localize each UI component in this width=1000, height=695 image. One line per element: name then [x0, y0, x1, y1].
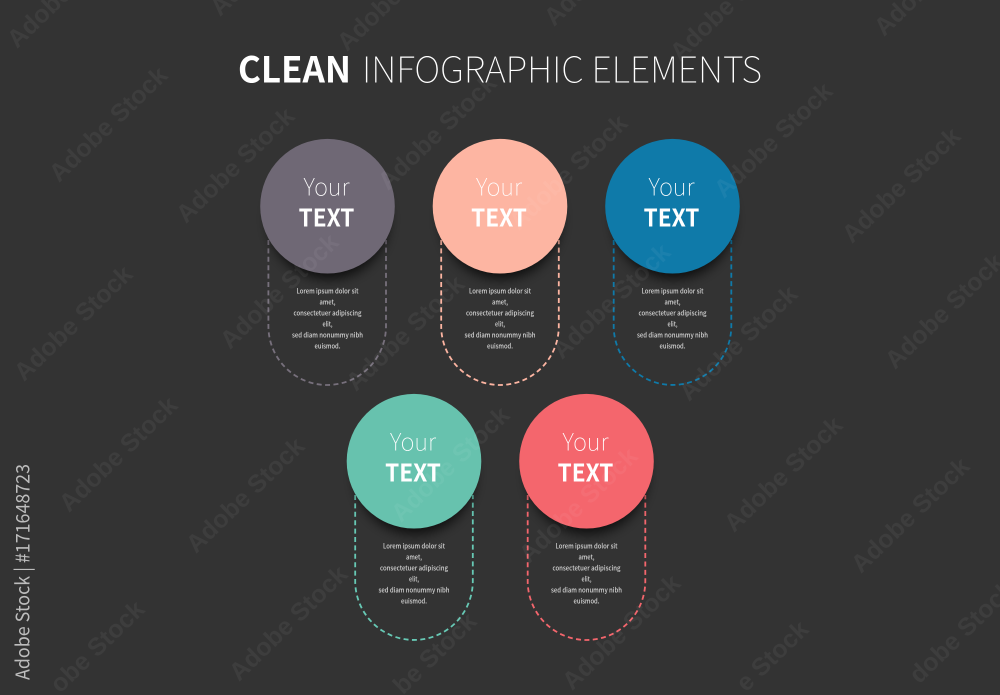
- body text: teal: elit,: [409, 574, 419, 584]
- watermark pattern: Adobe Stock: [837, 122, 966, 248]
- body text: grey: euismod.: [314, 340, 340, 350]
- body text: coral: consectetuer adipiscing: [552, 562, 621, 572]
- watermark pattern: Adobe Stock: [54, 391, 183, 517]
- label: coral: TEXT: [558, 454, 613, 489]
- circle: coral: [519, 394, 654, 534]
- watermark pattern: Adobe Stock: [547, 238, 676, 364]
- watermark pattern: Adobe Stock: [373, 69, 502, 195]
- body text: blue: sed diam nonummy nibh: [637, 330, 708, 340]
- watermark pattern: Adobe Stock: [44, 61, 173, 187]
- watermark pattern: Adobe Stock: [181, 432, 310, 558]
- body text: peach: Lorem ipsum dolor sit: [469, 286, 531, 296]
- body text: peach: amet,: [492, 296, 508, 306]
- body text: coral: sed diam nonummy nibh: [551, 584, 622, 594]
- body text: teal: euismod.: [401, 596, 427, 606]
- body text: teal: sed diam nonummy nibh: [378, 584, 450, 594]
- body text: blue: [637, 286, 708, 350]
- label: teal: Your: [390, 423, 437, 458]
- panel: peach item: [433, 139, 567, 385]
- label: blue: Your: [648, 168, 695, 203]
- body text: blue: Lorem ipsum dolor sit: [642, 286, 704, 296]
- circle: teal: [347, 394, 481, 534]
- label: peach: [471, 168, 527, 234]
- dashed outline: grey: [268, 240, 386, 385]
- watermark pattern: Adobe Stock: [709, 77, 838, 203]
- body text: grey: elit,: [322, 318, 332, 328]
- body text: grey: Lorem ipsum dolor sit: [296, 286, 359, 296]
- watermark pattern: Adobe Stock: [341, 270, 470, 396]
- dashed outline: coral: [528, 495, 645, 640]
- watermark pattern: Adobe Stock: [846, 452, 975, 578]
- body text: coral: amet,: [578, 552, 594, 562]
- body text: grey: sed diam nonummy nibh: [292, 330, 363, 340]
- panel: grey item: [260, 139, 395, 385]
- watermark pattern: Adobe Stock: [9, 260, 138, 386]
- dashed outline: blue: [614, 240, 731, 385]
- body text: peach: [464, 286, 536, 350]
- watermark pattern: Adobe Stock: [557, 569, 686, 695]
- label: coral: [558, 423, 613, 489]
- dashed outline: teal: [355, 495, 473, 640]
- watermark pattern: Adobe Stock: [386, 401, 515, 527]
- body text: teal: consectetuer adipiscing: [380, 562, 448, 572]
- body text: grey: amet,: [320, 296, 336, 306]
- watermark pattern: Adobe Stock: [171, 102, 300, 228]
- body text: coral: Lorem ipsum dolor sit: [556, 540, 618, 550]
- watermark pattern: Adobe Stock: [504, 109, 633, 235]
- body text: teal: Lorem ipsum dolor sit: [383, 540, 445, 550]
- label: teal: [385, 423, 441, 489]
- title: INFOGRAPHIC ELEMENTS: [362, 42, 762, 94]
- body text: coral: [551, 540, 622, 606]
- body text: peach: sed diam nonummy nibh: [464, 330, 536, 340]
- watermark pattern: Adobe Stock: [215, 228, 344, 354]
- watermark pattern: e Stock: [731, 615, 814, 695]
- watermark pattern: Adobe Stock: [719, 411, 848, 537]
- watermark pattern: Adobe Stock: [674, 280, 803, 406]
- label: peach: TEXT: [471, 199, 527, 234]
- body text: blue: amet,: [664, 296, 680, 306]
- body text: peach: elit,: [495, 318, 505, 328]
- watermark pattern: Adobe Stock: [514, 442, 643, 568]
- dashed outline: peach: [441, 240, 559, 385]
- circle: blue: [605, 139, 740, 279]
- body text: peach: euismod.: [487, 340, 513, 350]
- body text: teal: [378, 540, 450, 606]
- label: blue: [644, 168, 699, 234]
- body text: blue: euismod.: [660, 340, 686, 350]
- label: grey: [299, 168, 354, 234]
- watermark pattern: Adobe Stock: [224, 560, 353, 686]
- label: peach: Your: [476, 168, 523, 203]
- body text: grey: consectetuer adipiscing: [294, 308, 362, 318]
- body text: coral: euismod.: [574, 596, 600, 606]
- label: grey: TEXT: [299, 199, 354, 234]
- panel: coral item: [519, 394, 654, 640]
- body text: grey: [292, 286, 363, 350]
- label: teal: TEXT: [385, 454, 441, 489]
- body text: teal: amet,: [406, 552, 422, 562]
- circle: peach: [433, 139, 567, 279]
- title: CLEAN: [238, 42, 351, 94]
- label: grey: Your: [304, 168, 350, 203]
- body text: coral: elit,: [582, 574, 592, 584]
- panel: blue item: [605, 139, 740, 385]
- body text: blue: consectetuer adipiscing: [638, 308, 707, 318]
- label: blue: TEXT: [644, 199, 699, 234]
- panel: teal item: [347, 394, 481, 640]
- stock id sidebar: Adobe Stock | #171648723: [8, 464, 36, 680]
- body text: peach: consectetuer adipiscing: [466, 308, 534, 318]
- circle: grey: [260, 139, 395, 279]
- body text: blue: elit,: [668, 318, 678, 328]
- label: coral: Your: [562, 423, 609, 458]
